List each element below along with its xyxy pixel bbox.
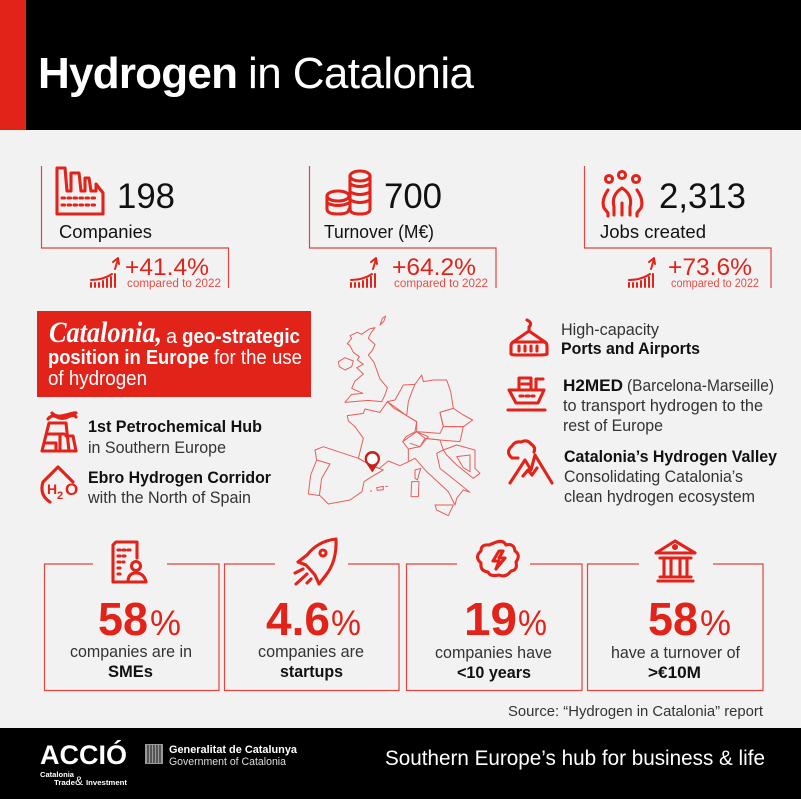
panel: young companies: 19 xyxy=(464,593,517,645)
text: ports and airports: Ports and Airports xyxy=(561,340,700,358)
panel: startups: startups xyxy=(280,663,343,681)
icon: location pin xyxy=(365,451,380,472)
icon: growth chart xyxy=(91,258,119,287)
icon: petrochemical plant xyxy=(42,413,76,451)
text: hydrogen valley: Catalonia’s Hydrogen Valley xyxy=(564,448,778,466)
panel: SMEs: SMEs xyxy=(108,663,153,681)
footer bar xyxy=(0,728,801,799)
panel: SMEs xyxy=(44,542,219,690)
panel: turnover over 10M: 58 xyxy=(648,593,698,645)
icon: H2O drop: H xyxy=(47,481,57,497)
panel: jobs stat: Jobs created xyxy=(600,222,706,242)
text: Generalitat: Government of Catalonia xyxy=(169,756,287,768)
panel: turnover over 10M xyxy=(588,541,763,690)
panel: jobs stat xyxy=(584,166,771,290)
panel: jobs stat: 2,313 xyxy=(659,177,746,216)
icon: growth chart xyxy=(629,258,655,287)
text: Ebro corridor xyxy=(87,468,271,507)
text: hydrogen valley: Consolidating Catalonia’s xyxy=(564,468,743,486)
logo: ACCIÓ xyxy=(40,739,128,788)
panel: turnover stat: +64.2% xyxy=(392,254,476,281)
icon: growth chart xyxy=(351,258,377,287)
header banner: Hydrogen xyxy=(38,49,238,98)
panel: turnover over 10M: have a turnover of xyxy=(611,644,740,662)
panel: SMEs: % xyxy=(150,604,181,643)
text: petrochemical hub xyxy=(88,417,262,457)
header banner xyxy=(0,0,801,130)
logo: ACCIÓ: ACCIÓ xyxy=(40,739,127,770)
icon: H2O drop xyxy=(42,467,78,502)
callout: geo-strategic position: a xyxy=(166,326,178,348)
panel: companies stat: compared to 2022 xyxy=(127,278,221,290)
icon: hydrogen valley mountains xyxy=(508,441,552,483)
text: hydrogen valley: clean hydrogen ecosystem xyxy=(564,488,755,506)
panel: companies stat xyxy=(42,166,228,290)
panel: young companies: <10 years xyxy=(457,664,531,682)
icon: ship xyxy=(508,378,545,410)
text: petrochemical hub: in Southern Europe xyxy=(88,438,226,457)
panel: jobs stat: compared to 2022 xyxy=(671,278,759,290)
callout: geo-strategic position: position in Europe xyxy=(48,347,209,369)
panel: startups xyxy=(224,539,399,690)
icon: H2O drop: O xyxy=(65,480,78,499)
panel: jobs stat: +73.6% xyxy=(668,254,752,281)
logo: ACCIÓ: & xyxy=(75,774,83,788)
text: H2MED: H2MED xyxy=(563,377,623,395)
text: H2MED xyxy=(563,377,774,435)
icon: institution building xyxy=(656,541,695,581)
icon: rocket xyxy=(295,539,336,584)
panel: SMEs: 58 xyxy=(98,593,148,645)
icon: people xyxy=(603,172,642,216)
header banner: in Catalonia xyxy=(248,49,475,98)
callout: geo-strategic position xyxy=(37,311,311,397)
logo: Generalitat emblem xyxy=(145,744,163,764)
icon: coins xyxy=(327,171,370,214)
slogan: Southern Europe’s hub for business & life xyxy=(385,747,765,770)
panel: turnover over 10M: % xyxy=(700,604,731,643)
text: H2MED: to transport hydrogen to the xyxy=(563,397,763,415)
panel: turnover over 10M: >€10M xyxy=(648,664,701,682)
text: H2MED: (Barcelona-Marseille) xyxy=(627,377,774,395)
icon: brain with bolt xyxy=(478,541,518,576)
logo: ACCIÓ: Investment xyxy=(86,778,128,787)
panel: turnover stat: compared to 2022 xyxy=(394,278,488,290)
text: Ebro corridor: Ebro Hydrogen Corridor xyxy=(88,468,271,487)
panel: SMEs: companies are in xyxy=(70,643,192,661)
text: Generalitat xyxy=(169,744,298,768)
panel: turnover stat: 700 xyxy=(384,177,442,216)
panel: turnover stat xyxy=(310,166,496,290)
text: H2MED: rest of Europe xyxy=(563,417,663,435)
icon: container crane xyxy=(511,320,547,355)
panel: turnover stat: Turnover (M€) xyxy=(324,222,434,242)
text: ports and airports: High-capacity xyxy=(561,321,660,339)
text: hydrogen valley xyxy=(564,448,778,506)
panel: startups: 4.6 xyxy=(266,593,330,645)
panel: companies stat: Companies xyxy=(59,222,152,242)
text: ports and airports xyxy=(561,321,700,358)
map of Western Europe xyxy=(308,316,480,516)
logo: ACCIÓ: Trade xyxy=(54,778,75,787)
panel: startups: % xyxy=(331,604,361,643)
callout: geo-strategic position: of hydrogen xyxy=(48,368,147,390)
icon: factory xyxy=(57,168,103,214)
text: petrochemical hub: 1st Petrochemical Hub xyxy=(88,417,262,436)
text: Ebro corridor: with the North of Spain xyxy=(87,488,251,507)
callout: geo-strategic position: geo-strategic xyxy=(182,326,300,348)
panel: young companies: % xyxy=(518,604,547,643)
callout: geo-strategic position: Catalonia, xyxy=(49,316,162,349)
logo: ACCIÓ: Catalonia xyxy=(40,770,75,779)
source note: Source: “Hydrogen in Catalonia” report xyxy=(508,704,763,720)
icon: building with person xyxy=(113,542,146,582)
panel: startups: companies are xyxy=(258,643,364,661)
panel: companies stat: +41.4% xyxy=(125,254,209,281)
text: Generalitat: Generalitat de Catalunya xyxy=(169,744,298,756)
panel: young companies xyxy=(406,541,582,690)
callout: geo-strategic position: for the use xyxy=(214,347,302,369)
panel: young companies: companies have xyxy=(435,644,552,662)
panel: companies stat: 198 xyxy=(117,177,175,216)
icon: H2O drop: 2 xyxy=(57,490,63,502)
